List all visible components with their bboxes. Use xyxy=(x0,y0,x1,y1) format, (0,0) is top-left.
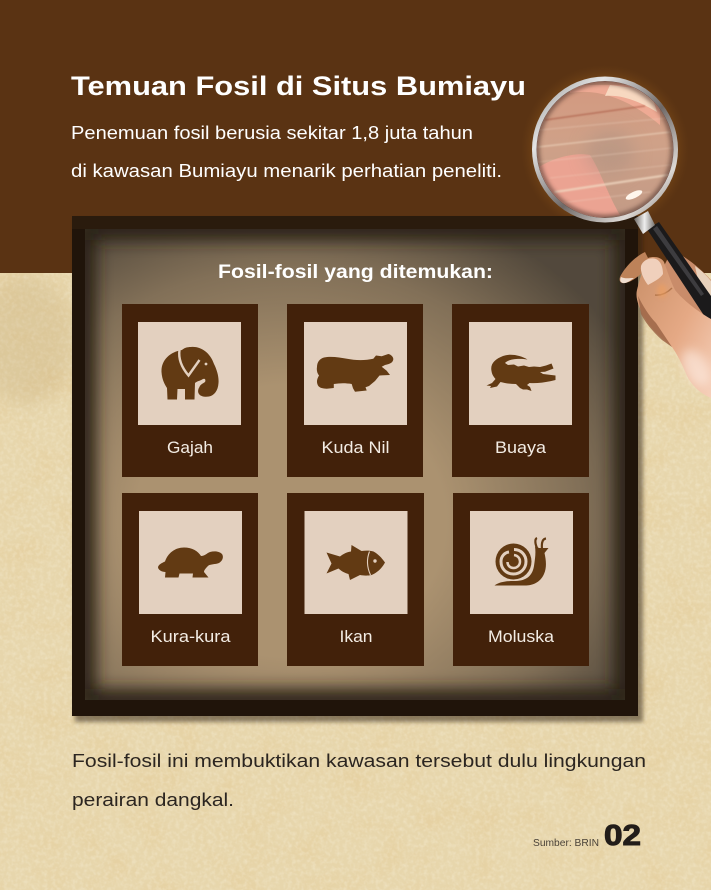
card: Moluska xyxy=(453,493,589,666)
closing text: perairan dangkal. xyxy=(72,790,234,810)
paper background xyxy=(0,273,711,890)
icon: elephant xyxy=(161,347,219,400)
title: Temuan Fosil di Situs Bumiayu xyxy=(71,71,526,101)
back finger xyxy=(620,252,650,283)
card: Gajah: Gajah xyxy=(167,439,213,457)
card: Gajah xyxy=(122,304,258,477)
card: Kura-kura xyxy=(122,493,258,666)
card: Ikan xyxy=(287,493,424,666)
intro text: Penemuan fosil berusia sekitar 1,8 juta tahun xyxy=(71,123,473,143)
icon: fish xyxy=(326,545,385,580)
closing text xyxy=(72,751,646,810)
card: Moluska: Moluska xyxy=(488,628,555,646)
card: Buaya xyxy=(452,304,589,477)
icon: crocodile xyxy=(486,355,556,391)
hand back xyxy=(662,250,711,345)
icon: snail xyxy=(494,538,548,586)
magnifier handle xyxy=(634,211,711,320)
brown header band xyxy=(0,0,711,273)
heading: fossils found: Fosil-fosil yang ditemukan: xyxy=(218,261,493,283)
thumb nail xyxy=(641,258,663,285)
intro text: di kawasan Bumiayu menarik perhatian peneliti. xyxy=(71,161,502,181)
intro text xyxy=(71,123,502,181)
card: Ikan: Ikan xyxy=(340,628,372,646)
closing text: Fosil-fosil ini membuktikan kawasan tersebut dulu lingkungan xyxy=(72,751,646,771)
icon: turtle xyxy=(158,548,223,578)
card: Buaya: Buaya xyxy=(495,439,547,457)
card: Kuda Nil xyxy=(287,304,423,477)
palm and thumb xyxy=(636,257,711,398)
page number: 02 xyxy=(604,820,641,852)
card: Kuda Nil: Kuda Nil xyxy=(322,439,390,457)
card: Kura-kura: Kura-kura xyxy=(150,628,231,646)
illustration: hand holding magnifier xyxy=(620,211,711,398)
icon: magnifying glass xyxy=(532,76,678,225)
icon: hippo xyxy=(317,354,393,392)
source note: Sumber: BRIN xyxy=(533,837,599,849)
panel: fossil frame xyxy=(72,216,643,722)
